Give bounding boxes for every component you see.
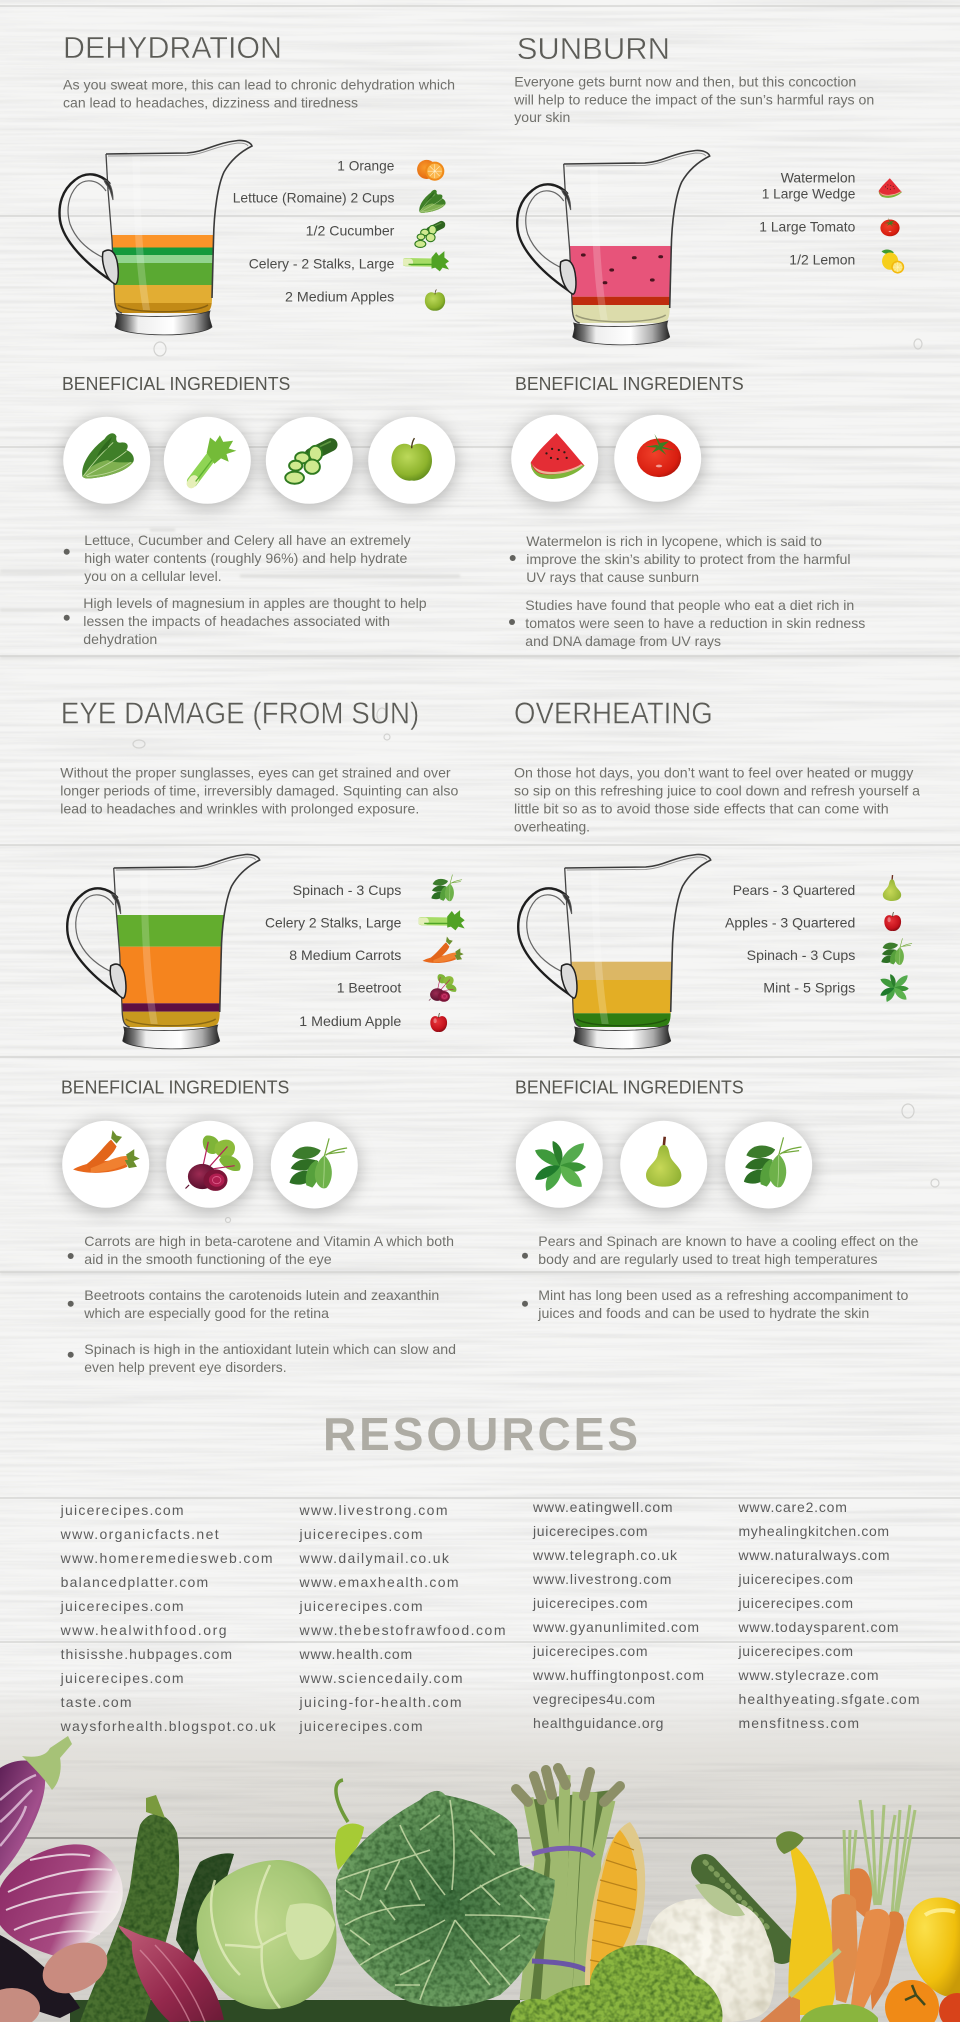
resource links column 3: juicerecipes.com bbox=[532, 1595, 648, 1611]
heading: overheating: OVERHEATING bbox=[514, 695, 713, 730]
intro text: sunburn: Everyone gets burnt now and then, but this concoction bbox=[514, 74, 856, 90]
savoy cabbage bbox=[336, 1791, 555, 2007]
ingredient list: dehydration: 1/2 Cucumber bbox=[306, 223, 395, 239]
ingredient list: overheating bbox=[725, 882, 855, 996]
icon: pear bbox=[883, 875, 901, 901]
intro text: eye damage: longer periods of time, irreversibly damaged. Squinting can also bbox=[60, 782, 459, 798]
zucchini behind cabbage bbox=[176, 1853, 234, 1965]
resource links column 3: juicerecipes.com bbox=[532, 1523, 648, 1539]
pink potato corner bbox=[0, 1988, 40, 2022]
red onion bbox=[118, 1925, 224, 2022]
icon: red apple bbox=[884, 912, 901, 931]
bullet list: eye damage benefits: which are especially good for the retina bbox=[83, 1305, 329, 1321]
icon: celery bbox=[405, 251, 449, 271]
intro text: dehydration bbox=[63, 76, 455, 110]
resource links column 4: healthyeating.sfgate.com bbox=[738, 1691, 920, 1707]
subheading: beneficial ingredients: BENEFICIAL INGREDIENTS bbox=[515, 1077, 744, 1097]
ingredient circles: eye damage bbox=[62, 1121, 358, 1208]
potato bbox=[34, 1933, 116, 2003]
resource links column 2: juicerecipes.com bbox=[298, 1718, 422, 1734]
resource links column 4: www.todaysparent.com bbox=[738, 1619, 898, 1635]
zucchini bbox=[80, 1795, 179, 2022]
resource links column 1: www.homeremediesweb.com bbox=[60, 1550, 273, 1566]
icon: mint bbox=[880, 974, 909, 1002]
icon: spinach bbox=[431, 875, 462, 901]
bullet list: overheating benefits: juices and foods and can be used to hydrate the skin bbox=[537, 1305, 869, 1321]
ingredient list: eye damage bbox=[265, 882, 402, 1029]
icon: green apple bbox=[425, 289, 445, 311]
ingredient list: eye damage: 1 Medium Apple bbox=[299, 1013, 402, 1029]
resource links column 2 bbox=[298, 1502, 506, 1734]
intro text: eye damage: Without the proper sunglasses, eyes can get strained and over bbox=[60, 764, 451, 780]
bullet list: dehydration benefits bbox=[64, 532, 427, 647]
resource links column 1: thisisshe.hubpages.com bbox=[61, 1646, 232, 1662]
resource links column 1: juicerecipes.com bbox=[60, 1670, 184, 1686]
resource links column 3 bbox=[532, 1499, 704, 1731]
intro text: eye damage bbox=[60, 764, 459, 816]
pitcher: eye damage juice layers bbox=[67, 854, 260, 1049]
ingredient list: eye damage: Celery 2 Stalks, Large bbox=[265, 914, 402, 930]
heading: dehydration: DEHYDRATION bbox=[63, 30, 282, 65]
resource links column 2: www.sciencedaily.com bbox=[298, 1670, 462, 1686]
resource links column 3: www.gyanunlimited.com bbox=[532, 1619, 699, 1635]
resource links column 4: www.naturalways.com bbox=[738, 1547, 890, 1563]
bullet list: eye damage benefits: Carrots are high in beta-carotene and Vitamin A which both bbox=[84, 1233, 454, 1249]
dark eggplant bbox=[0, 1935, 80, 2018]
ingredient circles: dehydration bbox=[63, 417, 455, 504]
icon: beetroot bbox=[429, 974, 456, 1002]
bullet list: sunburn benefits: UV rays that cause sunburn bbox=[526, 569, 699, 585]
cucumber bbox=[705, 1862, 782, 1950]
resource links column 1: waysforhealth.blogspot.co.uk bbox=[60, 1718, 277, 1734]
bullet list: dehydration benefits: Lettuce, Cucumber and Celery all have an extremely bbox=[84, 532, 411, 548]
ingredient list: dehydration: Celery - 2 Stalks, Large bbox=[249, 256, 395, 272]
resource links column 2: www.dailymail.co.uk bbox=[298, 1550, 450, 1566]
bullet list: dehydration benefits: High levels of magnesium in apples are thought to help bbox=[83, 595, 427, 611]
panel: sunburn bbox=[509, 31, 904, 649]
radicchio bbox=[0, 1844, 123, 1956]
resource links column 3: www.livestrong.com bbox=[532, 1571, 671, 1587]
intro text: overheating: overheating. bbox=[514, 818, 590, 834]
resource links column 1: balancedplatter.com bbox=[61, 1574, 208, 1590]
bullet list: sunburn benefits bbox=[509, 533, 865, 649]
bullet list: eye damage benefits: Beetroots contains the carotenoids lutein and zeaxanthin bbox=[84, 1287, 439, 1303]
intro text: sunburn: your skin bbox=[514, 109, 570, 125]
icon: red apple bbox=[430, 1013, 447, 1032]
ingredient list: dehydration: Lettuce (Romaine) 2 Cups bbox=[233, 190, 394, 206]
asparagus bundle bbox=[516, 1768, 620, 2010]
carrots bbox=[760, 1800, 915, 2022]
bullet list: sunburn benefits: and DNA damage from UV rays bbox=[525, 633, 721, 649]
bullet list: sunburn benefits: Watermelon is rich in lycopene, which is said to bbox=[526, 533, 822, 549]
intro text: dehydration: can lead to headaches, dizziness and tiredness bbox=[63, 94, 358, 110]
bullet list: eye damage benefits: Spinach is high in the antioxidant lutein which can slow and bbox=[84, 1341, 456, 1357]
resource links column 1: juicerecipes.com bbox=[60, 1598, 184, 1614]
ingredient list: sunburn: 1 Large Wedge bbox=[762, 186, 856, 202]
bullet list: eye damage benefits bbox=[68, 1233, 456, 1375]
yellow zucchini bbox=[776, 1831, 836, 2015]
resource links column 1 bbox=[60, 1502, 277, 1734]
ingredient list: sunburn: Watermelon bbox=[781, 170, 855, 186]
heading: sunburn: SUNBURN bbox=[517, 31, 670, 66]
bullet list: sunburn benefits: tomatos were seen to have a reduction in skin redness bbox=[525, 615, 865, 631]
bullet list: overheating benefits: Pears and Spinach are known to have a cooling effect on the bbox=[538, 1233, 919, 1249]
resource links column 3: healthguidance.org bbox=[533, 1715, 663, 1731]
panel: dehydration bbox=[60, 30, 455, 647]
intro text: dehydration: As you sweat more, this can lead to chronic dehydration which bbox=[63, 76, 455, 92]
bullet list: dehydration benefits: high water contents (roughly 96%) and help hydrate bbox=[84, 550, 408, 566]
resource links column 3: vegrecipes4u.com bbox=[533, 1691, 655, 1707]
ingredient list: sunburn bbox=[759, 170, 856, 268]
resource links column 4: juicerecipes.com bbox=[738, 1595, 853, 1611]
bullet list: overheating benefits bbox=[522, 1233, 919, 1321]
ingredient list: eye damage: 8 Medium Carrots bbox=[289, 947, 401, 963]
icon: watermelon bbox=[879, 178, 902, 198]
ingredient list: overheating: Pears - 3 Quartered bbox=[733, 882, 855, 898]
icon: spinach bbox=[881, 938, 912, 965]
ingredient list: dehydration: 1 Orange bbox=[337, 158, 395, 174]
icon: lemon bbox=[882, 249, 904, 274]
resource links column 3: juicerecipes.com bbox=[532, 1643, 648, 1659]
resource links column 2: www.health.com bbox=[298, 1646, 412, 1662]
subheading: beneficial ingredients: BENEFICIAL INGREDIENTS bbox=[515, 374, 744, 394]
icon: carrots bbox=[423, 937, 464, 963]
intro text: eye damage: lead to headaches and wrinkles with prolonged exposure. bbox=[60, 800, 419, 816]
resource links column 1: taste.com bbox=[61, 1694, 132, 1710]
panel: overheating bbox=[514, 695, 920, 1321]
resource links column 1: www.organicfacts.net bbox=[60, 1526, 219, 1542]
cauliflower bbox=[647, 1884, 775, 2022]
bullet list: eye damage benefits: aid in the smooth functioning of the eye bbox=[84, 1251, 332, 1267]
bullet list: eye damage benefits: even help prevent eye disorders. bbox=[84, 1359, 287, 1375]
ingredient list: overheating: Apples - 3 Quartered bbox=[725, 914, 855, 930]
footer: vegetables on grey wood bbox=[0, 1680, 960, 2022]
resource links column 4: www.care2.com bbox=[738, 1499, 847, 1515]
orange tomato bbox=[885, 1980, 939, 2022]
resource links column 4: www.stylecraze.com bbox=[738, 1667, 878, 1683]
resource links column 2: juicing-for-health.com bbox=[298, 1694, 462, 1710]
heading: resources: RESOURCES bbox=[323, 1408, 638, 1460]
pitcher: sunburn juice layers bbox=[517, 150, 710, 345]
ingredient list: dehydration bbox=[233, 158, 395, 305]
resource links column 2: www.livestrong.com bbox=[298, 1502, 448, 1518]
bullet list: dehydration benefits: you on a cellular level. bbox=[84, 568, 222, 584]
resource links column 4: juicerecipes.com bbox=[738, 1571, 853, 1587]
resource links column 4: myhealingkitchen.com bbox=[738, 1523, 889, 1539]
light green cabbage bbox=[197, 1860, 337, 2009]
pitcher: dehydration juice layers bbox=[60, 140, 252, 335]
resource links column 1: juicerecipes.com bbox=[60, 1502, 184, 1518]
panel: eye damage bbox=[60, 695, 465, 1375]
resource links column 3: www.eatingwell.com bbox=[532, 1499, 673, 1515]
ingredient list: overheating: Spinach - 3 Cups bbox=[747, 947, 855, 963]
ingredient list: eye damage: Spinach - 3 Cups bbox=[293, 882, 401, 898]
green chili pepper bbox=[335, 1780, 364, 1870]
resource links column 3: www.telegraph.co.uk bbox=[532, 1547, 678, 1563]
curly lettuce bbox=[510, 1945, 723, 2022]
resource links column 2: juicerecipes.com bbox=[298, 1526, 422, 1542]
subheading: beneficial ingredients: BENEFICIAL INGREDIENTS bbox=[62, 374, 290, 394]
icon: lettuce bbox=[419, 190, 446, 213]
resource links column 2: juicerecipes.com bbox=[298, 1598, 422, 1614]
pitcher: overheating juice layers bbox=[518, 854, 711, 1049]
ingredient circles: overheating bbox=[516, 1121, 812, 1208]
ingredient list: sunburn: 1/2 Lemon bbox=[789, 252, 855, 268]
bullet list: dehydration benefits: dehydration bbox=[83, 631, 157, 647]
yellow bell pepper bbox=[906, 1897, 960, 1996]
ingredient list: dehydration: 2 Medium Apples bbox=[285, 289, 394, 305]
ingredient circles: sunburn bbox=[511, 415, 701, 502]
ingredient list: overheating: Mint - 5 Sprigs bbox=[763, 980, 855, 996]
intro text: sunburn bbox=[513, 74, 874, 125]
icon: tomato bbox=[880, 218, 900, 236]
intro text: overheating bbox=[514, 764, 920, 834]
bullet list: overheating benefits: body and are regularly used to treat high temperatures bbox=[538, 1251, 878, 1267]
red tomato edge bbox=[939, 1993, 960, 2022]
intro text: overheating: On those hot days, you don’t want to feel over heated or muggy bbox=[514, 764, 913, 780]
resource links column 4: juicerecipes.com bbox=[738, 1643, 853, 1659]
resource links column 4: mensfitness.com bbox=[738, 1715, 859, 1731]
icon: celery bbox=[421, 910, 465, 930]
bullet list: sunburn benefits: Studies have found that people who eat a diet rich in bbox=[525, 597, 854, 613]
resource links column 2: www.thebestofrawfood.com bbox=[298, 1622, 506, 1638]
icon: orange bbox=[417, 160, 444, 181]
heading: eye damage: EYE DAMAGE (FROM SUN) bbox=[61, 695, 419, 730]
bottom lettuce leaf bbox=[800, 2004, 878, 2022]
corn on the cob bbox=[585, 1822, 645, 1992]
bullet list: sunburn benefits: improve the skin’s ability to protect from the harmful bbox=[526, 551, 851, 567]
resource links column 1: www.healwithfood.org bbox=[60, 1622, 227, 1638]
resource links column 2: www.emaxhealth.com bbox=[298, 1574, 458, 1590]
bullet list: overheating benefits: Mint has long been used as a refreshing accompaniment to bbox=[538, 1287, 909, 1303]
resource links column 3: www.huffingtonpost.com bbox=[532, 1667, 704, 1683]
bullet list: dehydration benefits: lessen the impacts of headaches associated with bbox=[83, 613, 390, 629]
grey wood table bbox=[0, 1680, 960, 2022]
ingredient list: sunburn: 1 Large Tomato bbox=[759, 219, 856, 235]
intro text: overheating: so sip on this refreshing juice to cool down and refresh yourself a bbox=[514, 782, 920, 798]
intro text: overheating: little bit so as to avoid those side effects that can come with bbox=[514, 800, 889, 816]
resource links column 4 bbox=[738, 1499, 920, 1731]
ingredient list: eye damage: 1 Beetroot bbox=[337, 980, 401, 996]
icon: cucumber bbox=[415, 223, 441, 247]
purple eggplant bbox=[0, 1736, 72, 1876]
subheading: beneficial ingredients: BENEFICIAL INGREDIENTS bbox=[61, 1077, 289, 1097]
intro text: sunburn: will help to reduce the impact of the sun’s harmful rays on bbox=[513, 92, 874, 108]
